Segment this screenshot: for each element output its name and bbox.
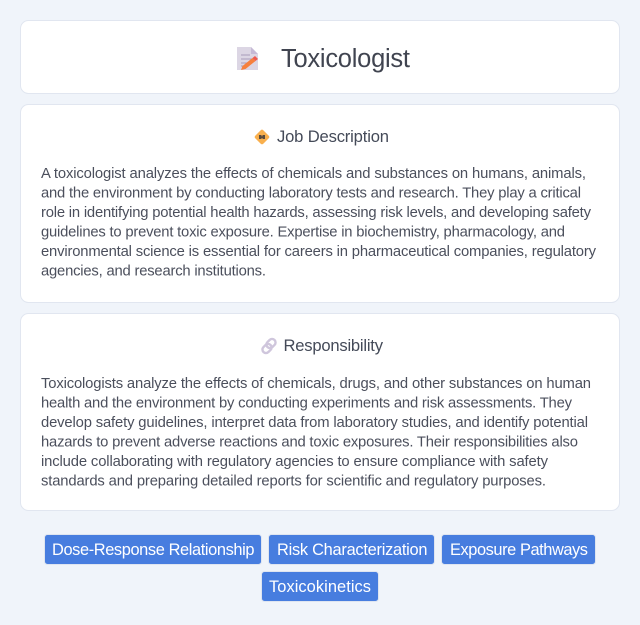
tag: Toxicokinetics: Toxicokinetics <box>269 578 371 596</box>
text block: job description <box>41 166 597 280</box>
text block: responsibility: health and the environment by conducting experiments and risk assessments. They <box>41 396 573 412</box>
heading: Toxicologist: Toxicologist <box>281 45 410 73</box>
text block: job description: guidelines to prevent toxic exposure. Expertise in biochemistry, pharmacology, and <box>41 224 565 240</box>
text block: job description: agencies, and research institutions. <box>41 264 266 280</box>
icon: orange diamond <box>254 129 270 145</box>
tag: Dose-Response Relationship <box>44 534 262 564</box>
text block: responsibility: standards and preparing detailed reports for scientific and regulatory purposes. <box>41 474 546 490</box>
icon: chain link <box>261 337 277 355</box>
tag: Dose-Response Relationship: Dose-Response Relationship <box>52 541 254 559</box>
text block: job description: and the environment by conducting laboratory tests and research. They play a critical <box>41 186 581 202</box>
text block: job description: A toxicologist analyzes the effects of chemicals and substances on humans, animals, <box>41 166 586 182</box>
text block: responsibility <box>41 376 591 490</box>
icon: document with pencil <box>237 47 258 70</box>
panel: job description <box>20 104 620 302</box>
text block: job description: environmental science is essential for careers in pharmaceutical companies, regulatory <box>41 244 597 260</box>
text block: responsibility: include collaborating with regulatory agencies to ensure compliance with safety <box>41 454 549 470</box>
panel: title card <box>20 20 620 94</box>
tag: Exposure Pathways <box>442 534 596 564</box>
tag: Risk Characterization <box>268 534 434 564</box>
text block: responsibility: Toxicologists analyze the effects of chemicals, drugs, and other substances on human <box>41 376 591 392</box>
text block: responsibility: hazards to prevent adverse reactions and toxic exposures. Their responsibilities also <box>41 434 578 450</box>
heading: job description: Job Description <box>277 127 389 146</box>
panel: responsibility <box>20 314 620 510</box>
tag: Risk Characterization: Risk Characterization <box>277 541 428 559</box>
heading: responsibility: Responsibility <box>284 336 384 355</box>
tag: Exposure Pathways: Exposure Pathways <box>450 541 588 559</box>
text block: job description: role in identifying potential health hazards, assessing risk levels, and developing safety <box>41 205 592 221</box>
tag: Toxicokinetics <box>262 572 378 602</box>
text block: responsibility: develop safety guidelines, interpret data from laboratory studies, and identify potential <box>41 415 588 431</box>
